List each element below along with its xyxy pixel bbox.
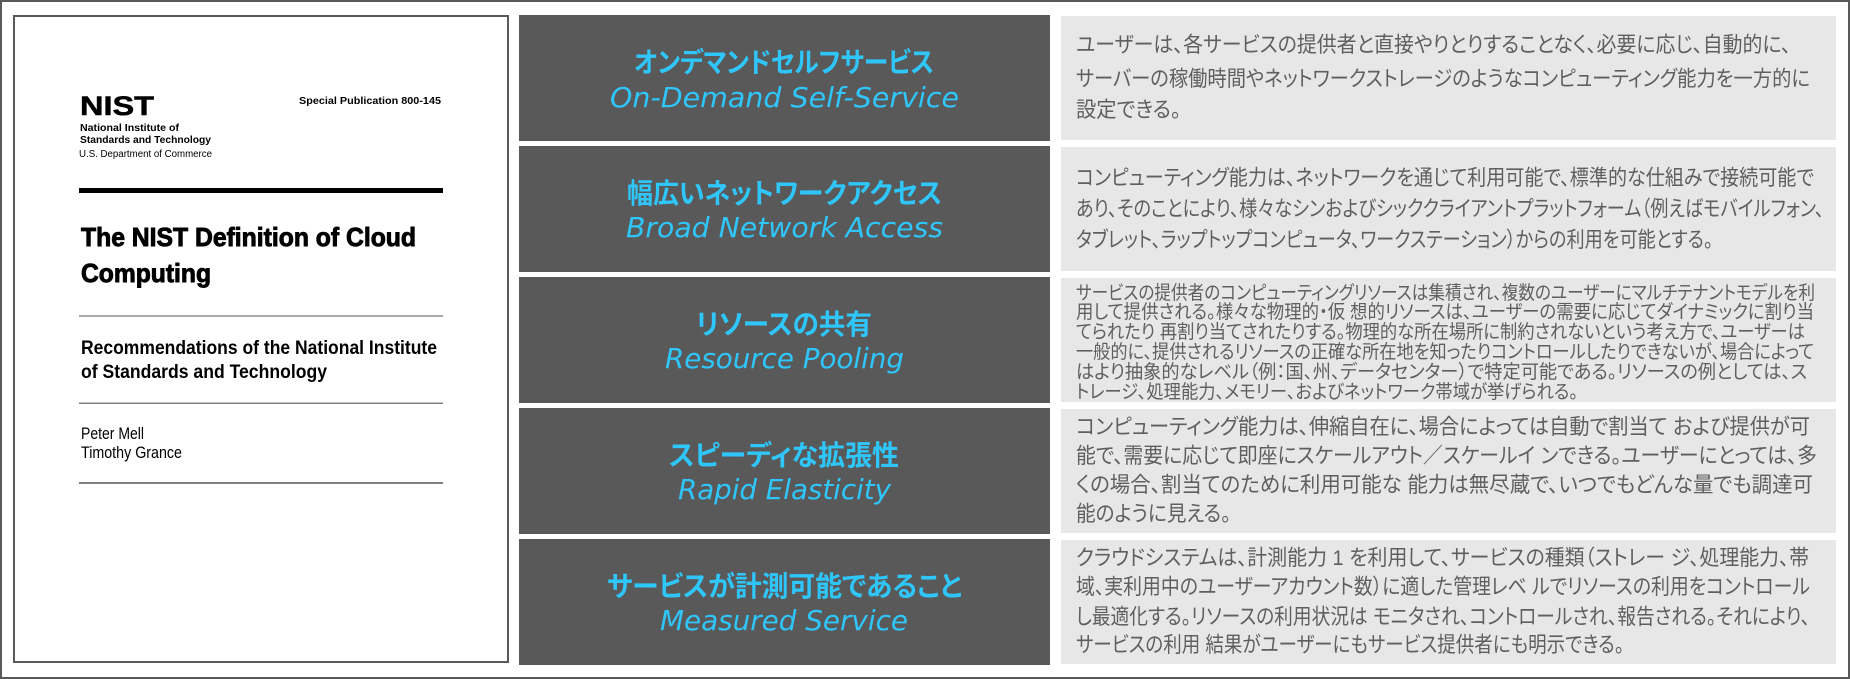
panel: resource pooling description: トレージ、処理能力、メモリー、およびネットワーク帯域が挙げられる。 (1076, 381, 1578, 403)
organisation name: National Institute of (80, 123, 180, 134)
panel: resource pooling heading (519, 277, 1050, 403)
panel: on-demand self-service description: ユーザーは、各サービスの提供者と直接やりとりすることなく、必要に応じ、自動的に、 (1076, 33, 1791, 57)
organisation name (79, 123, 212, 160)
organisation name: Standards and Technology (80, 135, 211, 146)
panel: on-demand self-service description: 設定できる。 (1076, 98, 1181, 122)
panel: measured service description (1061, 540, 1836, 664)
document subtitle: Recommendations of the National Institute (81, 337, 437, 359)
panel: broad network access heading: 幅広いネットワークアクセス (627, 178, 942, 209)
panel: resource pooling description (1061, 278, 1836, 403)
document title: Computing (81, 258, 211, 288)
panel: measured service heading (519, 539, 1050, 665)
panel: broad network access heading (519, 146, 1050, 272)
authors: Peter Mell (81, 424, 144, 443)
panel: on-demand self-service heading (519, 15, 1050, 141)
panel: rapid elasticity description: 能のように見える。 (1076, 502, 1231, 526)
panel: measured service heading: Measured Service (660, 605, 908, 637)
organisation name: U.S. Department of Commerce (79, 149, 212, 160)
panel: rapid elasticity heading: スピーディな拡張性 (669, 439, 899, 471)
panel: resource pooling heading: Resource Pooling (665, 343, 904, 375)
panel: measured service description: クラウドシステムは、計測能力 1 を利用して、サービスの種類（ストレー ジ、処理能力、帯 (1076, 546, 1809, 570)
panel: broad network access heading: Broad Network Access (626, 212, 943, 244)
panel: rapid elasticity heading (519, 408, 1050, 534)
authors: Timothy Grance (81, 443, 182, 462)
panel: measured service description: サービスの利用 結果がユーザーにもサービス提供者にも明示できる。 (1076, 633, 1624, 657)
NIST logo: NIST (80, 91, 154, 121)
authors (81, 424, 182, 462)
document title (81, 222, 416, 288)
panel: rapid elasticity description: コンピューティング能力は、伸縮自在に、場合によっては自動で割当て および提供が可 (1076, 415, 1810, 439)
panel: measured service heading: サービスが計測可能であること (607, 570, 962, 602)
panel: broad network access description: タブレット、ラップトップコンピュータ、ワークステーション）からの利用を可能とする。 (1076, 228, 1713, 252)
document subtitle (81, 337, 437, 383)
document title: The NIST Definition of Cloud (81, 222, 416, 252)
panel: rapid elasticity description: くの場合、割当てのために利用可能な 能力は無尽蔵で、いつでもどんな量でも調達可 (1076, 473, 1813, 497)
panel: rapid elasticity description (1061, 409, 1836, 533)
document subtitle: of Standards and Technology (81, 361, 327, 383)
panel: resource pooling description: はより抽象的なレベル（例：国、州、データセンター）で特定可能である。リソースの例としては、ス (1076, 361, 1807, 383)
panel: NIST document cover (14, 16, 508, 662)
panel: broad network access description (1061, 147, 1836, 271)
panel: on-demand self-service heading: On-Demand Self-Service (610, 82, 959, 114)
panel: rapid elasticity heading: Rapid Elasticity (678, 474, 892, 506)
panel: on-demand self-service heading: オンデマンドセルフサービス (634, 46, 934, 78)
panel: on-demand self-service description (1061, 16, 1836, 140)
publication number: Special Publication 800-145 (299, 95, 441, 107)
panel: resource pooling heading: リソースの共有 (696, 309, 872, 340)
